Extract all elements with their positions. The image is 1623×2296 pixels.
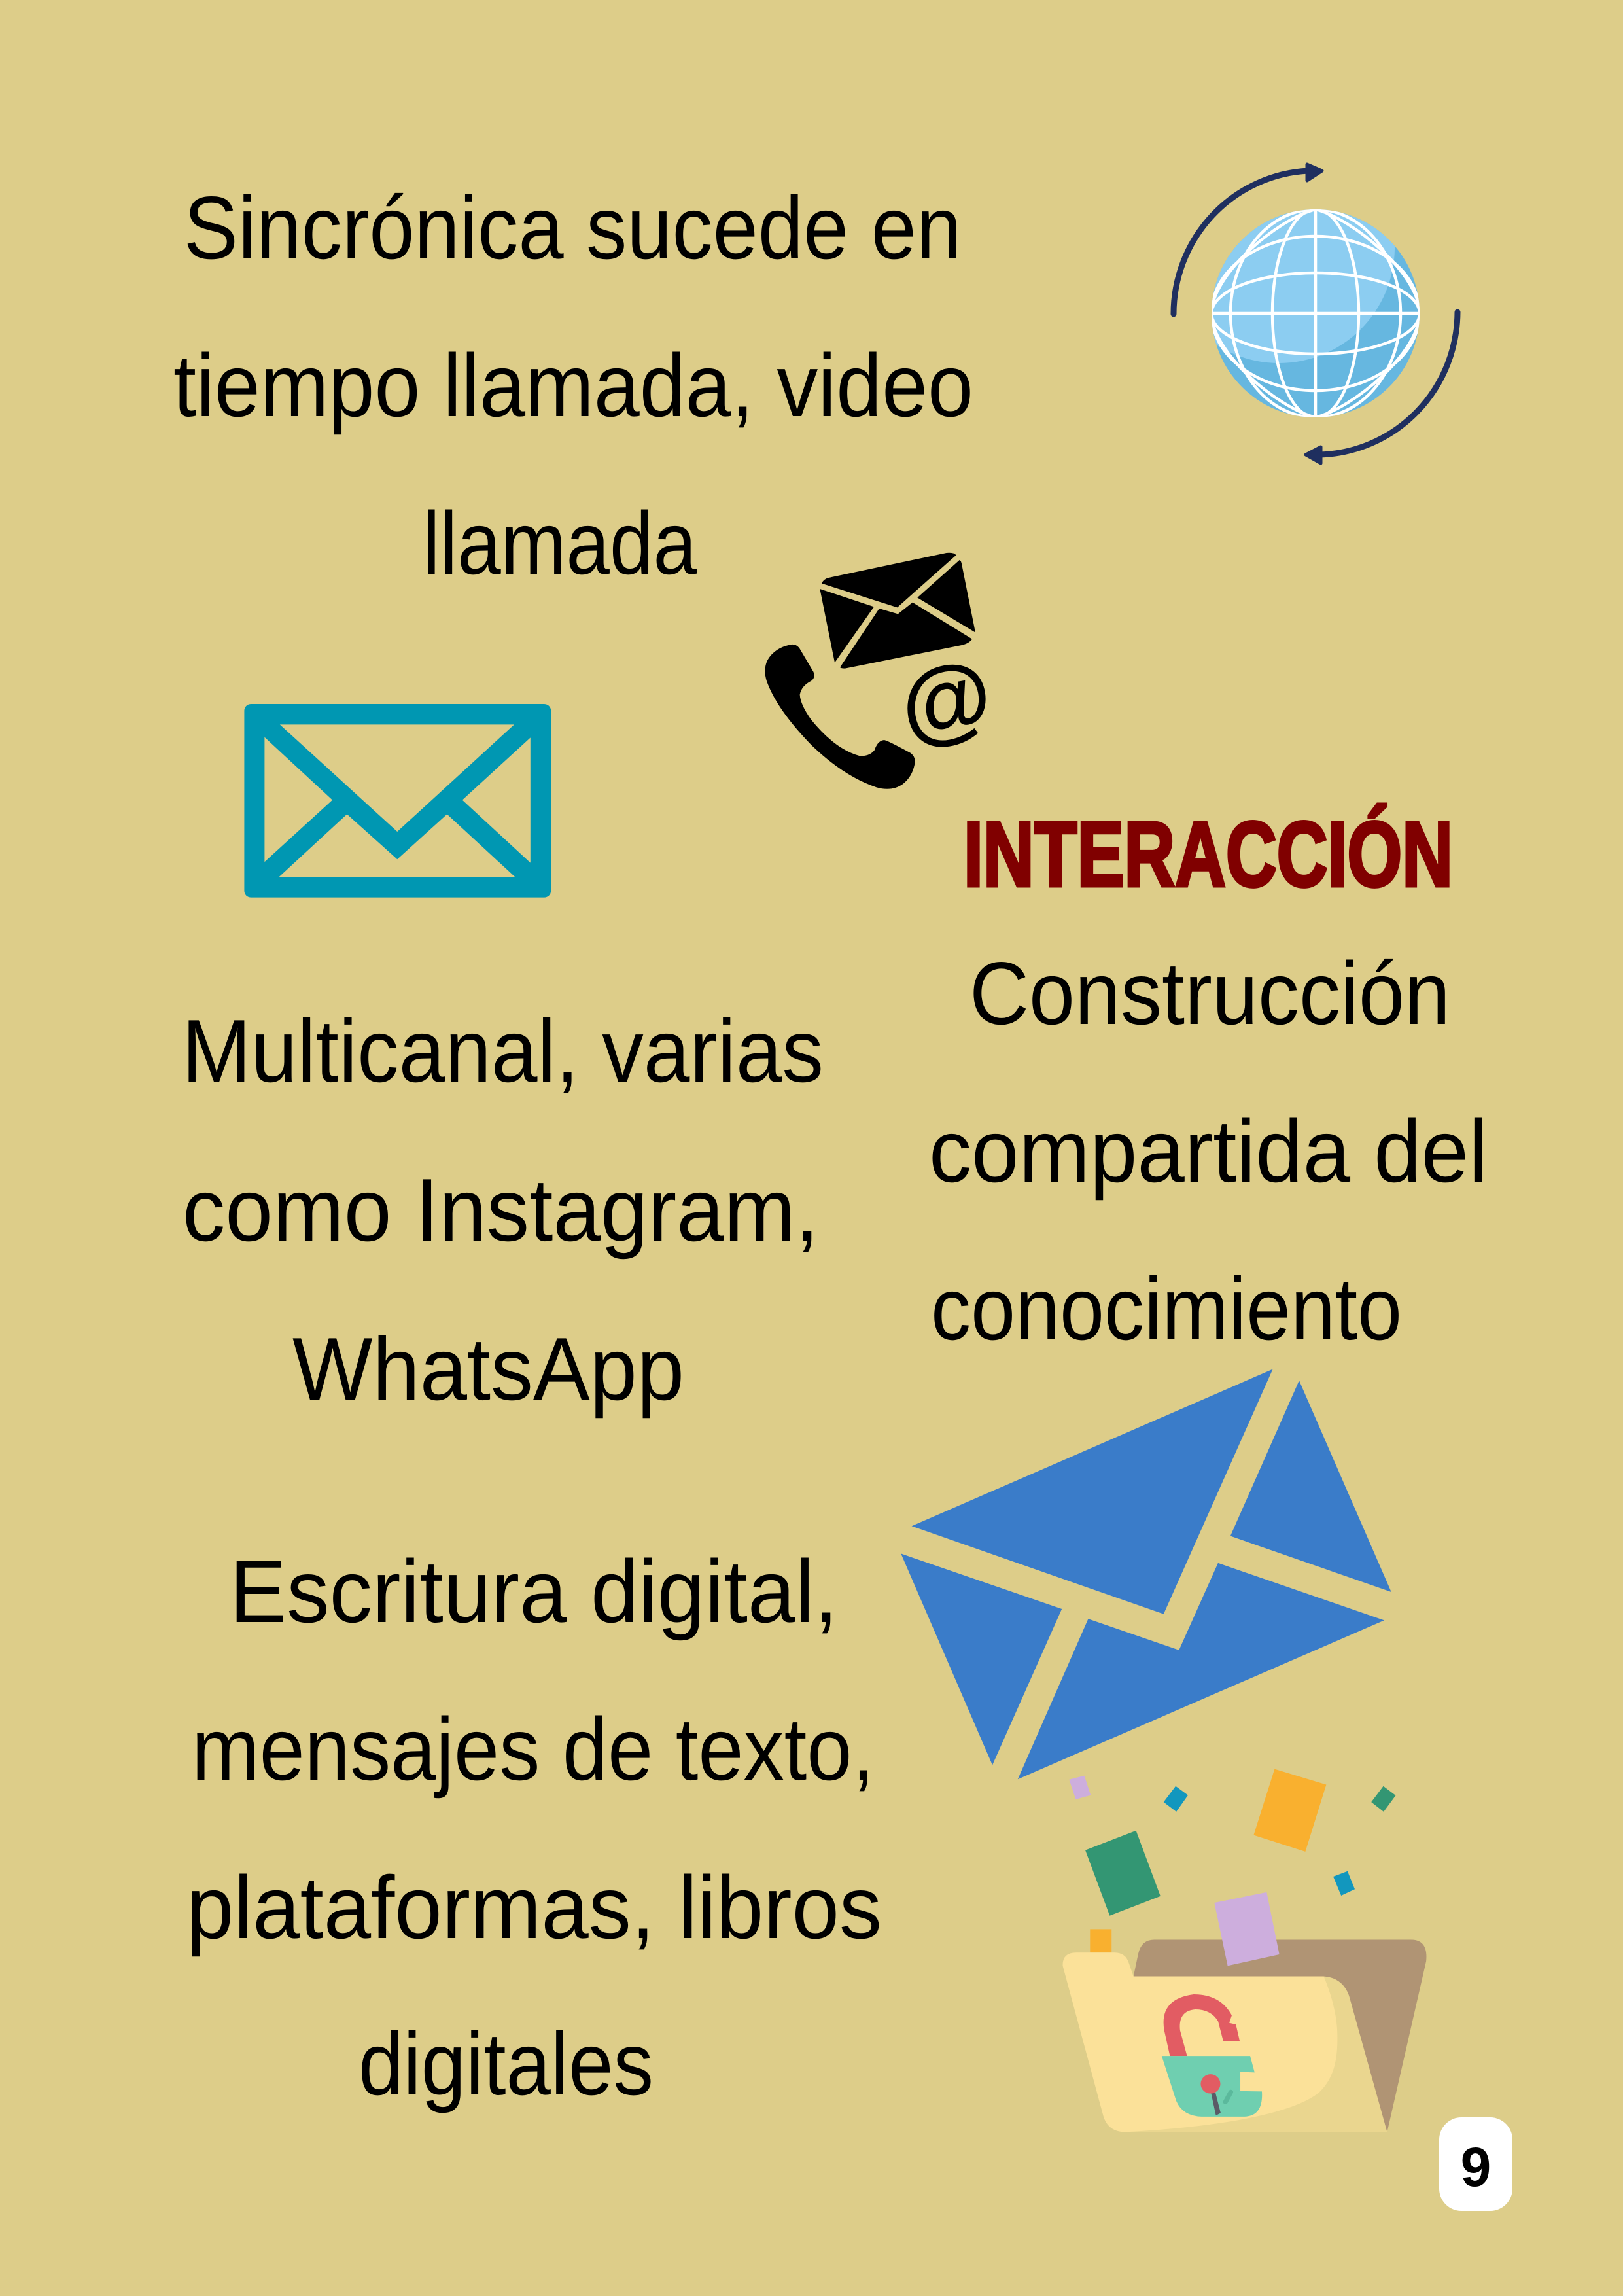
text block: multicanal: como Instagram, (183, 1160, 819, 1260)
text block: construcción compartida: Construcción (969, 944, 1450, 1043)
icon: teal envelope (244, 704, 551, 898)
text block: sincrónica: Sincrónica sucede en (184, 178, 962, 277)
text block: escritura digital: plataformas, libros (186, 1858, 882, 1957)
heading: interacción: INTERACCIÓN (964, 802, 1453, 906)
icon: open padlock (1162, 1994, 1262, 2117)
text block: escritura digital: mensajes de texto, (192, 1699, 875, 1799)
folder back (1134, 1939, 1426, 2132)
page number badge: 9 (1461, 2136, 1491, 2198)
icon: phone and black envelope (765, 553, 975, 789)
text block: sincrónica: tiempo llamada, video (173, 336, 973, 435)
page number badge (1439, 2117, 1512, 2211)
icon: phone, envelope and at sign (765, 553, 1000, 789)
icon: blue envelope (901, 1369, 1391, 1779)
lilac sheet (1214, 1892, 1280, 1966)
text block: multicanal (182, 1001, 824, 1419)
text block: construcción compartida (929, 944, 1488, 1358)
text block: escritura digital (186, 1542, 882, 2113)
icon: at sign: @ (892, 641, 1000, 759)
arrow: bottom right arc (1306, 312, 1457, 463)
text block: construcción compartida: compartida del (929, 1101, 1488, 1201)
text block: multicanal: WhatsApp (292, 1319, 684, 1419)
arrow: top left arc (1174, 164, 1322, 314)
folder front (1063, 1952, 1387, 2132)
text block: sincrónica: llamada (423, 493, 697, 593)
text block: escritura digital: Escritura digital, (230, 1542, 838, 1641)
text block: multicanal: Multicanal, varias (182, 1001, 824, 1101)
text block: construcción compartida: conocimiento (931, 1259, 1402, 1358)
confetti squares (1069, 1769, 1396, 1954)
icon: rotating globe (1171, 162, 1460, 465)
text block: escritura digital: digitales (358, 2014, 654, 2113)
text block: sincrónica (173, 178, 973, 593)
icon: folder with lock and confetti (1063, 1769, 1426, 2132)
